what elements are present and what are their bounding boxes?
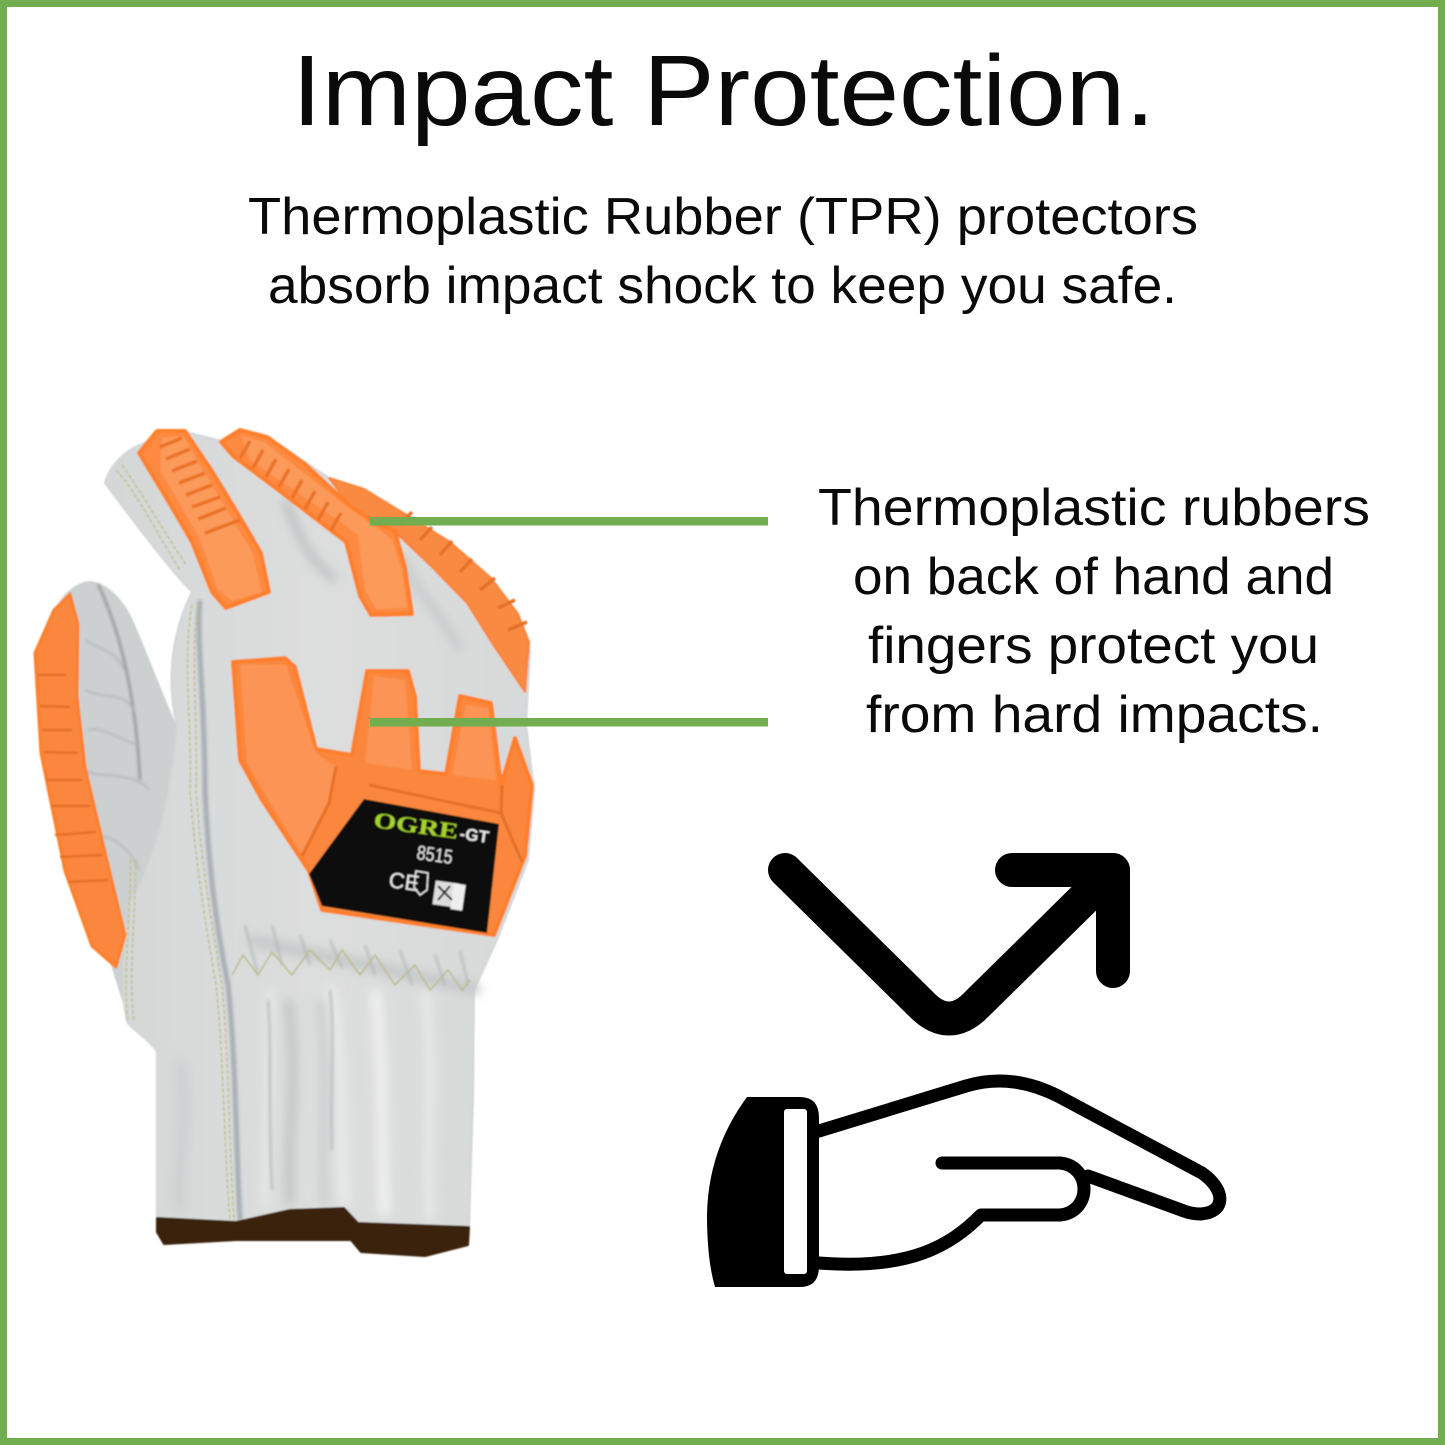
intro text: Thermoplastic Rubber (TPR) protectors bbox=[248, 188, 1198, 246]
callout line: fingers bbox=[370, 517, 768, 526]
label logo and markings: CE bbox=[387, 867, 421, 896]
ring guard ribs bbox=[400, 512, 527, 630]
wrist gather folds bbox=[245, 925, 468, 1190]
intro text: absorb impact shock to keep you safe. bbox=[268, 257, 1177, 315]
callout line: back of hand bbox=[370, 718, 768, 726]
thumb leather bbox=[54, 581, 177, 1010]
leather shading folds bbox=[179, 500, 480, 1220]
index guard blocks bbox=[160, 436, 262, 601]
callout text: on back of hand and bbox=[853, 548, 1334, 606]
middle finger guard bbox=[221, 430, 412, 615]
icon: rebound arrow bbox=[785, 870, 1113, 1018]
label logo and markings: -GT bbox=[458, 824, 491, 847]
callout text bbox=[818, 479, 1370, 744]
stitching bbox=[116, 465, 234, 1220]
product label bbox=[309, 799, 499, 933]
back guard inner ridges bbox=[302, 767, 522, 862]
callout text: from hard impacts. bbox=[866, 686, 1323, 744]
cuff binding bbox=[157, 1208, 469, 1256]
callout text: Thermoplastic rubbers bbox=[818, 479, 1370, 537]
thumb guard ribs bbox=[38, 675, 108, 882]
hand outline bbox=[819, 1081, 1220, 1264]
back guard facets bbox=[240, 664, 496, 856]
hand and cuff leather bbox=[105, 430, 534, 1228]
icon: hand with cuff bbox=[707, 1081, 1220, 1287]
hand cuff bbox=[707, 1097, 819, 1287]
ring and little finger guard bbox=[329, 478, 529, 692]
thumb creases bbox=[82, 584, 150, 870]
label logo and markings: OGRE bbox=[372, 807, 460, 844]
intro text bbox=[248, 188, 1198, 315]
glove photo illustration bbox=[35, 430, 534, 1256]
index finger guard bbox=[139, 431, 269, 608]
back of hand guard bbox=[233, 658, 532, 935]
callout text: fingers protect you bbox=[868, 617, 1319, 675]
middle guard blocks bbox=[242, 436, 407, 609]
label logo and markings: 8515 bbox=[415, 842, 454, 869]
thumb guard bbox=[35, 594, 125, 967]
title: Impact Protection. bbox=[292, 35, 1155, 147]
label logo and markings bbox=[372, 807, 491, 911]
grey side seam bbox=[199, 600, 240, 1220]
index guard ribs bbox=[160, 438, 240, 533]
cuff window bbox=[784, 1109, 807, 1274]
middle guard ribs bbox=[240, 441, 341, 530]
gathered elastic stitching bbox=[232, 950, 470, 990]
